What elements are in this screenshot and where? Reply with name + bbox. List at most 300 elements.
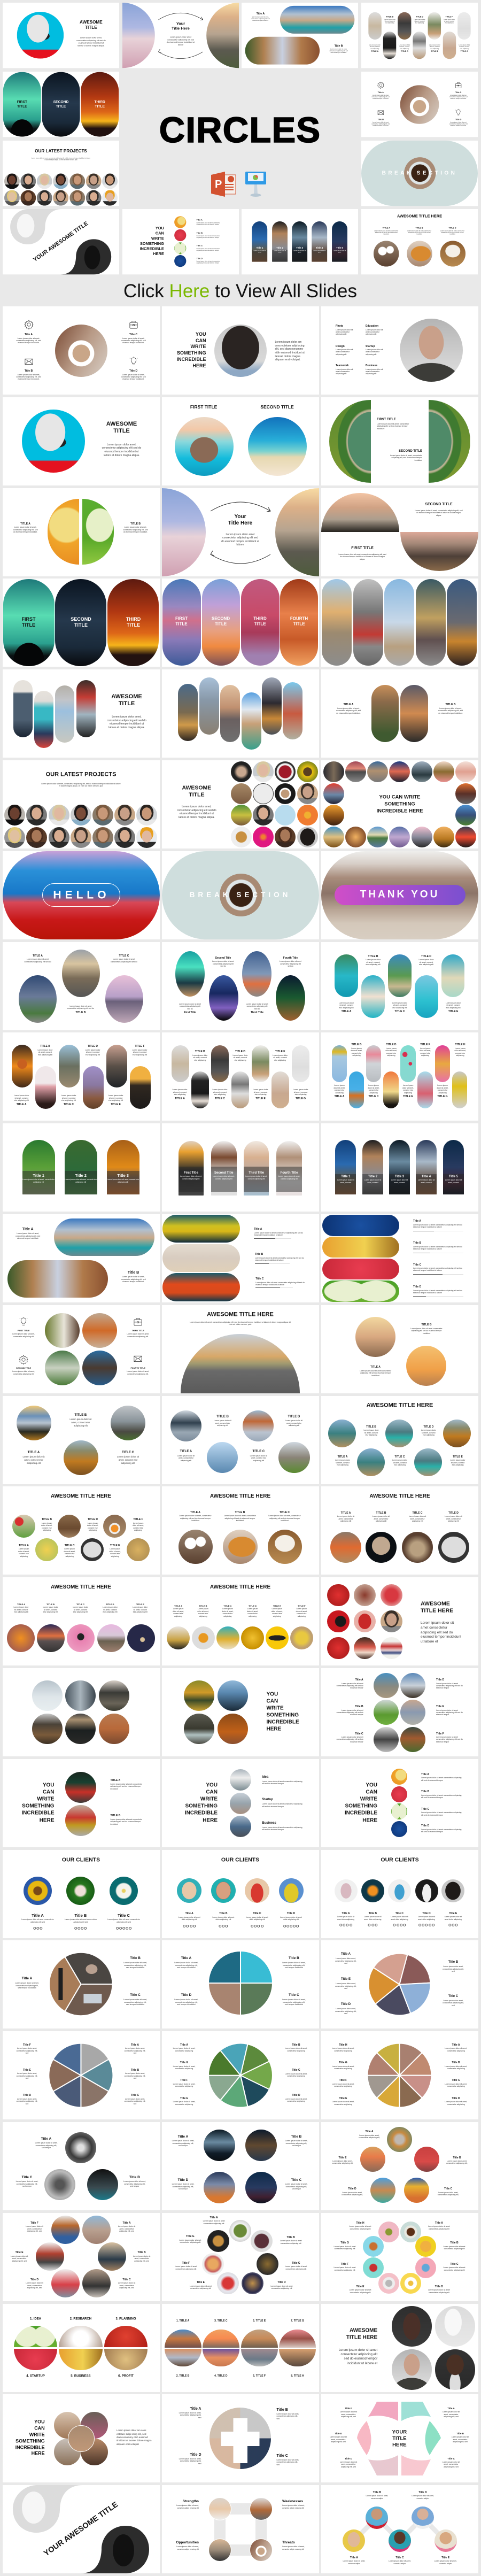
text: title B: Title B [448,1961,458,1964]
text: title A: Lorem ipsum dolor sit amet, consectetur adipiscing elit, sed [179,2412,201,2419]
text labels: Lorem ipsum dolor sit amet consectetur adipiscing elit sed do eiusmod tempor [337,1709,363,1716]
text labels right: Lorem ipsum dolor sit amet, consectetur adipiscing [445,2083,467,2087]
text: title B: TITLE B [416,227,423,229]
arch cards: Lorem ipsum dolor sit amet, consect etur adipiscing elit [22,1178,55,1183]
text: weaknesses: Weaknesses [282,2500,303,2503]
text: title B: Lorem ipsum dolor amet, consectetur adipiscing elit, sed [443,1965,464,1972]
text labels: Lorem ipsum dolor sit amet, consect etur adipiscing [421,1429,436,1436]
row 3 slide: five tall pills [321,579,478,667]
photo: beach [248,417,307,476]
text: title C: Lorem ipsum dolor sit amet, consectetur adipiscing elit, sed [277,2459,299,2466]
text: title A [177,2407,201,2419]
text: title D: Lorem ipsum dolor sit amet, consectetur adipiscing elit, sed eiusmod tempor incididunt. [449,121,468,127]
photo: misty town half [275,488,319,576]
heading: YOU [43,1783,55,1788]
text: title A [176,1450,196,1462]
text: second: SECOND TITLE [16,1367,31,1369]
text: title C: Lorem ipsum dolor sit amet, consectetur adipiscing elit sed do eiusmod tempor incididunt [268,1515,301,1522]
text labels: TITLE D [106,1603,114,1606]
text: first [338,546,386,560]
photo: lion [82,1351,117,1385]
text labels left: Title F [339,2079,347,2082]
text labels: TITLE E [111,1103,121,1106]
text labels: Title C [253,1912,261,1915]
icon: briefcase [455,82,462,88]
text list [196,219,220,264]
heading [185,1782,218,1824]
text: title B [67,1005,94,1014]
heading: AWESOME TITLE HERE [369,1493,430,1499]
text: title C: Title C [277,2454,288,2458]
basket photo [268,1530,302,1564]
arch cards: Lorem ipsum dolor sit amet, consect etur adipiscing elit [65,1178,97,1183]
text labels [2,1577,159,1665]
text list [321,1759,478,1847]
text labels: Title G [340,2241,349,2245]
labels: THIRD [253,616,267,621]
text labels: Lorem ipsum dolor sit amet, consect etur adipiscing [253,1089,268,1096]
body text: Lorem ipsum dolor sit amet consectetur adipiscing elit sed do eiusmod tempor incididunt ut labore et [339,2349,377,2365]
row 0 slide: coffee icons [2,306,159,395]
text: title B: Lorem ipsum dolor sit amet, consectetur adipiscing elit sed do eiusmod tempor incididunt [407,230,431,235]
heading: AWESOME TITLE HERE [210,1493,270,1499]
text labels: Lorem ipsum dolor sit amet, consect etur adipiscing [335,1459,350,1466]
text labels [321,1396,478,1484]
arch cards: Lorem ipsum dolor sit amet [313,250,325,253]
text: title C [114,1451,141,1464]
text: title B: Lorem ipsum dolor sit amet, consectetur adipiscing elit, sed eiusmod tempor incididunt. [371,121,390,127]
text: title C: TITLE C [253,1450,265,1453]
text labels left [321,2031,478,2119]
text labels: Lorem ipsum dolor sit amet consectetur adipiscing elit sed do eiusmod tempor [436,1709,463,1716]
text labels: Fourth Title [283,957,298,960]
text labels: Lorem ipsum dolor amet, consectetur adipiscing elit, [438,2191,459,2196]
text labels left [2,2031,159,2119]
heading: SOMETHING [345,1803,377,1809]
heading: AWESOME TITLE HERE [397,214,442,219]
shape: dark blob [2,2485,159,2573]
text labels [161,2213,319,2301]
photo: weaknesses [249,2497,273,2520]
text: title C: TITLE C [122,1451,134,1454]
text labels: Lorem ipsum dolor sit amet, consect etur adipiscing elit [108,1094,123,1101]
text: business [366,364,387,375]
photo: pink lake [105,975,143,1023]
text labels bottom [321,2485,478,2573]
photo: raspberries [322,1259,399,1279]
text labels left: Lorem ipsum dolor amet, consectetur adipiscing elit, sed [17,2098,37,2105]
text: title D [121,369,146,380]
text labels left: Lorem ipsum dolor sit amet, consectetur adipiscing [173,2047,195,2052]
text labels: Lorem ipsum dolor amet, consectetur adipiscing elit, [446,2160,468,2164]
heading: AWESOME [182,784,211,791]
text: business: Lorem ipsum dolor sit amet consectetur adipiscing elit sed do eiusmod tempor [262,1826,302,1831]
text labels: Lorem ipsum dolor sit amet, consect etur adipiscing elit [37,1049,53,1056]
photo: light tunnel [65,2132,96,2163]
text labels top: Lorem ipsum dolor sit amet, consetur adipin [366,2495,388,2500]
text labels: Lorem ipsum dolor sit amet consectetur adipiscing elit sed do [179,1003,201,1010]
top slide: furniture pills [361,3,478,68]
top labels [161,2304,319,2392]
arch cards: Title 2 [75,1173,87,1178]
text labels: Lorem ipsum dolor sit amet, consect etur adipiscing [369,44,381,50]
text: title A [335,1953,356,1965]
text labels: Lorem ipsum dolor amet, consectetur adipiscing elit, [359,2134,380,2139]
text: title B: Title B [255,1253,263,1256]
text labels [321,2213,478,2301]
row 7 slide: five narrow pills [321,942,478,1030]
text: title A [110,1779,143,1790]
bottom labels: 8. TITLE H [291,2374,304,2378]
text: title C [121,333,146,344]
text: title A [374,227,399,235]
heading: YOU [34,2419,45,2425]
heading: Your [176,22,185,26]
text labels right: Title C [292,2069,300,2072]
text labels top: Title B [373,2491,381,2494]
text: title D [449,118,468,127]
row 3 slide: three tall pills [2,579,159,667]
photo pill: aurora [3,579,55,666]
text: title B: Title B [335,45,343,48]
text: title D [173,1993,199,2006]
top labels: 5. TITLE E [253,2319,266,2323]
text: title B: TITLE B [446,703,455,706]
progress C [413,1274,463,1275]
heading: YOUR [392,2429,407,2435]
text: title A [358,1366,392,1377]
photo pill 5 [447,579,477,666]
text labels: TITLE F [275,1050,285,1053]
photo: tuscany dome [321,493,399,532]
text: second [12,1367,35,1375]
icon: bulb [129,357,138,365]
text: title A [16,333,41,344]
text: title D [335,2003,356,2015]
text: title B: Lorem ipsum dolor sit amet consectetur adipiscing elit sed do eiusmod tempor incididunt ut labore [413,1246,462,1250]
text labels bottom: Title A [350,2556,358,2559]
text: title A: Title A [181,1956,191,1960]
text labels: Lorem ipsum dolor sit amet, consectetur adipiscing elit, sed [443,2461,460,2468]
text: title B [123,2176,146,2188]
text: idea: Idea [262,1776,268,1779]
text: title C: Title C [129,333,137,336]
photo pill: fire [107,579,159,666]
text: title B [67,1414,94,1427]
icon: gear [377,81,384,89]
text: title A: Title A [22,1977,32,1980]
photo: skyscraper [203,2130,235,2161]
text labels: Lorem ipsum dolor sit amet dolor adipiscing [445,1916,462,1921]
text: title C [413,1263,464,1272]
row 21 slide: six people ring [2,2213,159,2301]
text: title C [111,954,137,963]
outlined pill [42,883,120,907]
text labels: Lorem ipsum dolor sit amet, consect etur adipiscing [437,1084,448,1094]
progress A [254,1238,291,1239]
text: teamwork [336,364,357,375]
photo: lily [66,1877,95,1905]
text: title E: Lorem ipsum dolor amet, consectetur adipiscing elit, sed [335,1983,356,1989]
text labels: TITLE A [17,1103,26,1106]
heading: Your [234,514,246,520]
photo halves lower [161,2304,319,2392]
text: title B: Title B [130,1956,141,1960]
connector bars [161,2485,319,2573]
photo: castle bowl [400,532,478,571]
text: title A: Title A [341,1953,351,1956]
text labels: TITLE B [368,955,378,958]
row 10 slide: four fruit pills [321,1214,478,1302]
text labels [161,1032,319,1121]
text: title A [25,954,51,963]
labels: TITLE [215,621,227,626]
text labels: Lorem ipsum dolor sit amet, consectetur adipiscing elit, sed [133,2255,150,2262]
text labels: Lorem ipsum dolor sit amet dolor adipiscing [364,1916,382,1921]
text labels: Lorem ipsum dolor sit amet consectetur adipiscing elit [428,2225,450,2230]
text: title C [249,1450,268,1462]
text labels: Lorem ipsum dolor sit amet, consect etur adipiscing [444,19,455,24]
croissant photo [223,1530,258,1564]
heading [80,20,103,30]
photo: windmill [18,975,57,1023]
heading [421,1601,453,1614]
text labels: Lorem ipsum dolor sit amet, consect etur adipiscing [420,1047,431,1056]
arch cards: Title 4 [316,247,323,250]
top labels: 3. TITLE C [214,2319,228,2323]
top slide: coffee icons [361,72,478,137]
text labels [321,2122,478,2210]
heading: AWESOME TITLE HERE [51,1584,111,1590]
text labels: Title A [435,2222,443,2225]
text labels: TITLE A [338,1455,347,1459]
text: title B [284,2135,308,2147]
labels: FOURTH [290,616,308,621]
text: title B [64,1913,97,1923]
photo circles [2,1668,159,1756]
text labels right: Title B [292,2043,300,2047]
text labels: TITLE B [352,1043,361,1046]
row 14 slide: six circles [161,1577,319,1665]
text labels: Title A [342,1912,350,1915]
row 3 slide: four tall pills [161,579,319,667]
photo pill 2 [34,691,53,748]
text: title A: Title A [378,91,384,94]
text labels: Title A [210,2216,218,2219]
row 16 slide: three circles list [161,1759,319,1847]
progress D [413,1296,463,1297]
text labels left: Title F [180,2079,188,2082]
text: title A [20,1451,47,1464]
text labels: Lorem ipsum dolor sit amet, consect etur adipiscing [402,1084,414,1094]
text list: Lorem ipsum dolor sit amet consectetur adipiscing elit sed do eiusmod tempor [421,1829,461,1833]
fruit photos [174,216,186,267]
text labels left: Title E [23,2069,31,2072]
text labels: Lorem ipsum dolor sit amet consectetur adipiscing elit [179,2239,201,2243]
text: title C: Lorem ipsum dolor sit amet consectetur adipiscing elit sed do eiusmod tempor incididunt ut labore [255,1281,305,1286]
arch cards [161,1123,319,1212]
text labels: Lorem ipsum dolor sit amet consectetur adipiscing elit [444,2246,465,2250]
text labels: Lorem ipsum dolor sit amet, consect etur adipiscing elit [339,1002,354,1009]
text: title C: Lorem ipsum dolor sit amet conse ctetur adipiscing elit sed [107,1918,140,1923]
text list: Title B [196,232,202,234]
text: title A: Lorem ipsum dolor sit amet conse ctetur adipiscing elit sed [21,1918,54,1923]
text labels: Lorem ipsum dolor sit amet, consectetur adipiscing elit [409,1515,426,1522]
label first: TITLE [22,622,35,628]
text labels: Lorem ipsum dolor sit amet, consectetur adipiscing elit, sed [118,2225,135,2232]
text: title A [13,522,38,534]
text: title C [267,1511,301,1522]
white cross [161,2394,319,2482]
icon: mail [25,358,33,365]
text labels [321,1850,478,1938]
label second: TITLE [56,104,66,108]
text: photo: Photo [336,325,343,328]
row 1 slide: split aerial circle [321,397,478,485]
row 8 slide: colourful pills [321,1032,478,1121]
text: title D [413,1285,464,1294]
arch cards [2,1123,159,1212]
text: title B: Title B [129,2176,140,2179]
heading: CAN [43,1790,55,1795]
row 11 slide: two sunset circles [321,1305,478,1393]
photo circles [161,1668,319,1756]
text labels: Lorem ipsum dolor sit amet, consect etur adipiscing [41,1522,52,1531]
text: photo [336,325,357,336]
heading: THANK YOU [360,889,439,900]
text labels: Title A [185,1912,193,1915]
text labels: Lorem ipsum dolor sit amet consectetur adipiscing elit [334,2266,355,2271]
text labels: Lorem ipsum dolor sit amet consectetur adipiscing elit [428,2289,450,2294]
top slide: fruit list [122,209,239,274]
text: first: FIRST TITLE [377,418,396,421]
heading second: SECOND TITLE [260,404,294,410]
progress B [255,1263,290,1264]
text labels: Title F [182,2262,190,2265]
heading: SOMETHING [266,1712,299,1718]
stadium background [161,851,319,939]
icon: gear [19,1354,29,1364]
heading: WRITE [151,236,164,241]
arch cards: Lorem ipsum dolor sit amet [293,250,306,253]
pie of photos [321,2031,478,2119]
portraits [4,173,118,206]
text: startup: Lorem ipsum dolor sit amet consectetur adipiscing elit sed do eiusmod tempor [262,1803,302,1808]
text: threats: Lorem ipsum dolor sit amet, consetur adipin nescing elit [282,2546,305,2550]
arch cards: First Title [184,1171,198,1175]
text: title B: Title B [289,1956,299,1960]
heading: HERE [362,1817,377,1823]
text: title C [443,1995,464,2007]
heading: HELLO [53,889,110,901]
text labels: Lorem ipsum dolor sit amet, consect etur adipiscing [133,1522,144,1531]
photo: egret [45,1351,79,1385]
text labels [161,942,319,1030]
heading [139,226,164,256]
text: second: Lorem ipsum dolor sit amet, consectetur adipiscing elit, sed do eiusmod tempor incididunt [390,454,422,461]
text labels [2,1486,159,1575]
text list: Lorem ipsum dolor sit amet consectetur adipiscing elit sed do eiusmod tempor [196,248,220,251]
heading: YOU [196,331,206,337]
photo: van [230,1769,251,1791]
text: title B: Lorem ipsum dolor sit amet, consectetur adipiscing elit, sed tempor incididunt [123,1962,147,1969]
heading: HERE [40,1817,55,1823]
label second: SECOND [71,617,91,622]
portraits [161,1850,319,1938]
top slide: awesome title [3,3,119,68]
text labels left: Title E [180,2097,188,2100]
fruit photos [321,1759,478,1847]
text labels right: Lorem ipsum dolor sit amet, consectetur adipiscing [285,2047,307,2052]
heading: WRITE [190,344,206,349]
text labels left: Title G [180,2061,188,2064]
text labels: TITLE C [401,51,408,53]
text labels: Title D [436,1678,444,1682]
text labels left: Title D [23,2094,31,2097]
text: title A: Title A [25,333,33,336]
text: title B: Lorem ipsum dolor sit amet consectetur adipiscing elit sed do eiusmod tempor incididunt ut labore [255,1256,304,1261]
photo pills [368,12,471,59]
text: startup: Startup [262,1798,273,1801]
text: first [12,1330,35,1338]
text list: Title A [196,219,202,221]
heading: YOUR AWESOME TITLE [42,2501,119,2558]
text: threats: Threats [282,2541,295,2544]
heading first: FIRST TITLE [190,404,217,410]
text labels right: Title A [131,2043,139,2047]
body text: Lorem ipsum dolor amet, consectetur adipiscing elit sed do eiusmod tempor incididunt ut labore et dolore magna aliqua. [76,37,105,47]
text list: Lorem ipsum dolor sit amet consectetur adipiscing elit sed do eiusmod tempor [196,235,220,238]
text labels: Lorem ipsum dolor sit amet, consectetur adipiscing elit, sed [26,2225,43,2232]
text labels: Lorem ipsum dolor sit amet, consect etur adipiscing elit [132,1049,148,1056]
photo: hiker on road [65,1805,96,1836]
portrait E [435,2529,457,2552]
text: title B: Lorem ipsum dolor sit amet, consectetur adipiscing elit, sed eiusmod tempor incididunt. [16,373,41,380]
social icons [161,1850,319,1938]
text list: Title B [421,1790,429,1793]
text labels: Lorem ipsum dolor sit amet, consect etur adipiscing [399,44,410,50]
text: title A: Title A [41,2137,51,2141]
photo: threats [249,2539,273,2562]
arch cards: Lorem ipsum dolor sit amet [274,250,286,253]
arch cards: Title 2 [368,1175,377,1178]
text labels right [161,2031,319,2119]
arch cards: Lorem ipsum dolor sit amet, consect adipiscing elit [213,1175,235,1180]
text labels: Lorem ipsum dolor sit amet, consect etur adipiscing [173,1608,184,1617]
portrait C [389,2529,411,2552]
text: title C: Title C [22,2176,32,2179]
bottom labels: 5. BUSINESS [71,2374,91,2378]
label third: TITLE [127,622,140,628]
photo pill left [371,685,399,742]
text: title D: Title D [129,369,137,373]
text labels: Title A [447,2407,455,2410]
text: title A: Lorem ipsum dolor sit amet, consect etur adipiscing elit [22,1455,45,1464]
text: title A: TITLE A [28,1451,40,1454]
photo: man [400,319,463,382]
text labels [161,1850,319,1938]
text: title A [173,1956,199,1969]
heading: TITLE [113,428,130,434]
text labels: TITLE A [174,1605,182,1607]
labels: TITLE [293,621,305,626]
row 23 slide: six petals [321,2394,478,2482]
photo frame [321,760,478,849]
row 5 slide: photo frame [321,760,478,849]
text: second [387,450,422,461]
row 18 slide: pie five [321,1940,478,2029]
row 20 slide: three circles triangle [2,2122,159,2210]
